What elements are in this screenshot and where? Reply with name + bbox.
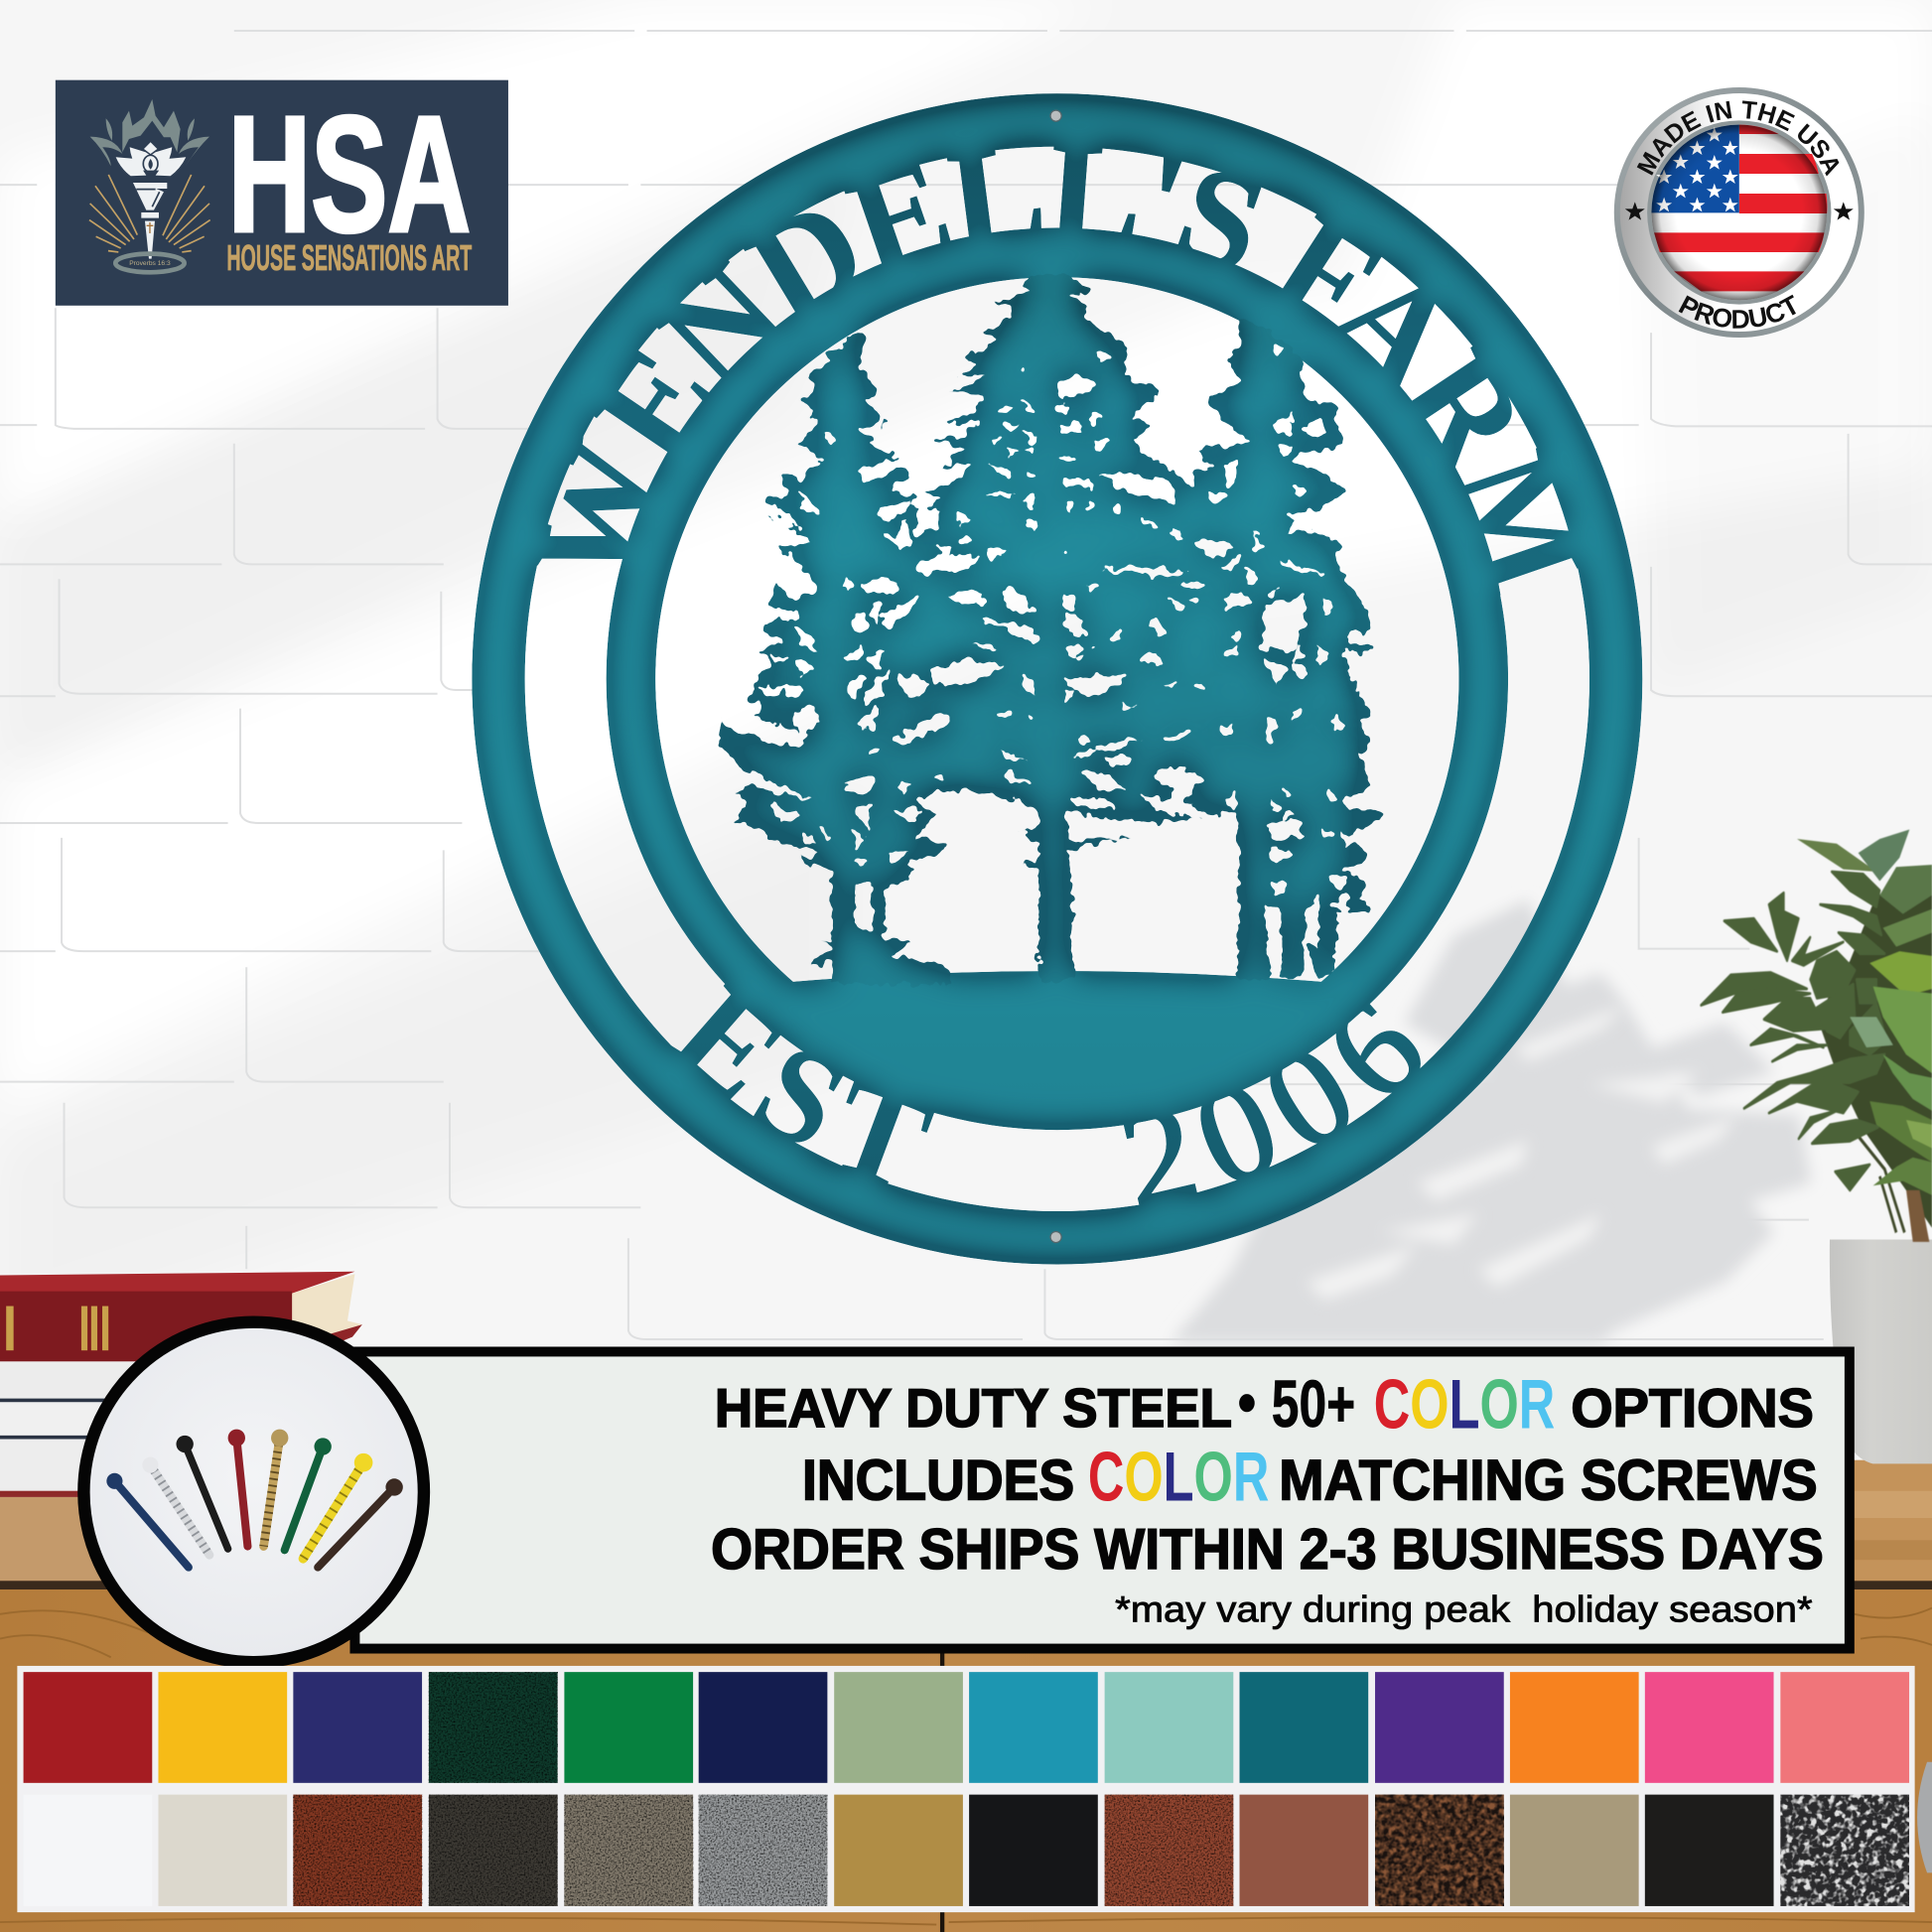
features line 3: ORDER SHIPS WITHIN 2-3 BUSINESS DAYS (711, 1518, 1824, 1582)
features line 1: HEAVY DUTY STEEL (715, 1378, 1232, 1439)
plant leaves (1701, 830, 1932, 1242)
inner ring (607, 227, 1508, 1130)
metal sign (472, 93, 1642, 1265)
plant shadow on wall (1171, 899, 1811, 1343)
box frame (354, 1351, 1850, 1649)
features footnote: *may vary during peak holiday season* (1115, 1587, 1813, 1629)
badge bottom text: PRODUCT (1678, 294, 1796, 329)
matching screws circle (83, 1322, 424, 1662)
logo tagline: HOUSE SENSATIONS ART (226, 237, 472, 278)
swatch row 1 (24, 1672, 1909, 1783)
features line 1: COLOR (1374, 1364, 1555, 1443)
outer ring (472, 93, 1642, 1265)
panel background (17, 1666, 1915, 1912)
features line 2: COLOR (1088, 1438, 1269, 1516)
features line 1: 50+ (1272, 1367, 1355, 1442)
swatch row 2 (24, 1795, 1909, 1906)
features line 2 (802, 1438, 1818, 1516)
badge stars (1625, 202, 1854, 220)
plant pot (1830, 1240, 1932, 1463)
screw fan (106, 1430, 403, 1568)
features line 2: MATCHING SCREWS (1279, 1449, 1818, 1512)
ground hill (773, 971, 1340, 1099)
potted plant (1701, 830, 1932, 1463)
HSA logo (56, 80, 508, 306)
pine trees (719, 273, 1388, 985)
sign bottom text: 2006: 2006 (1124, 1004, 1437, 1221)
features line 1: • (1238, 1371, 1256, 1435)
brick wall background (0, 0, 1932, 1355)
badge top text: MADE IN THE USA (1636, 100, 1839, 177)
features line 2: INCLUDES (802, 1449, 1074, 1512)
stack of books (0, 1272, 362, 1497)
logo wordmark HSA: HSA (228, 82, 471, 267)
badge flag (1647, 120, 1831, 305)
mounting screw bottom (1050, 1231, 1061, 1243)
mounting screw top (1050, 110, 1061, 121)
features line 1: OPTIONS (1571, 1378, 1814, 1439)
features box (354, 1351, 1850, 1649)
logo emblem (89, 99, 210, 272)
wooden desk and floor (0, 1460, 1932, 1932)
logo emblem: Proverbs 16:3 (129, 260, 171, 267)
features line 1 (715, 1364, 1814, 1443)
logo panel (56, 80, 508, 306)
shadow light streaks (1307, 1004, 1737, 1300)
circle plate (83, 1322, 424, 1662)
colour swatch panel (17, 1666, 1915, 1912)
made in the USA badge (1614, 87, 1864, 338)
sign top text: WENDELL'S FARM (524, 127, 1590, 596)
badge bezel (1614, 87, 1864, 338)
sign bottom text: EST: EST (665, 979, 935, 1195)
